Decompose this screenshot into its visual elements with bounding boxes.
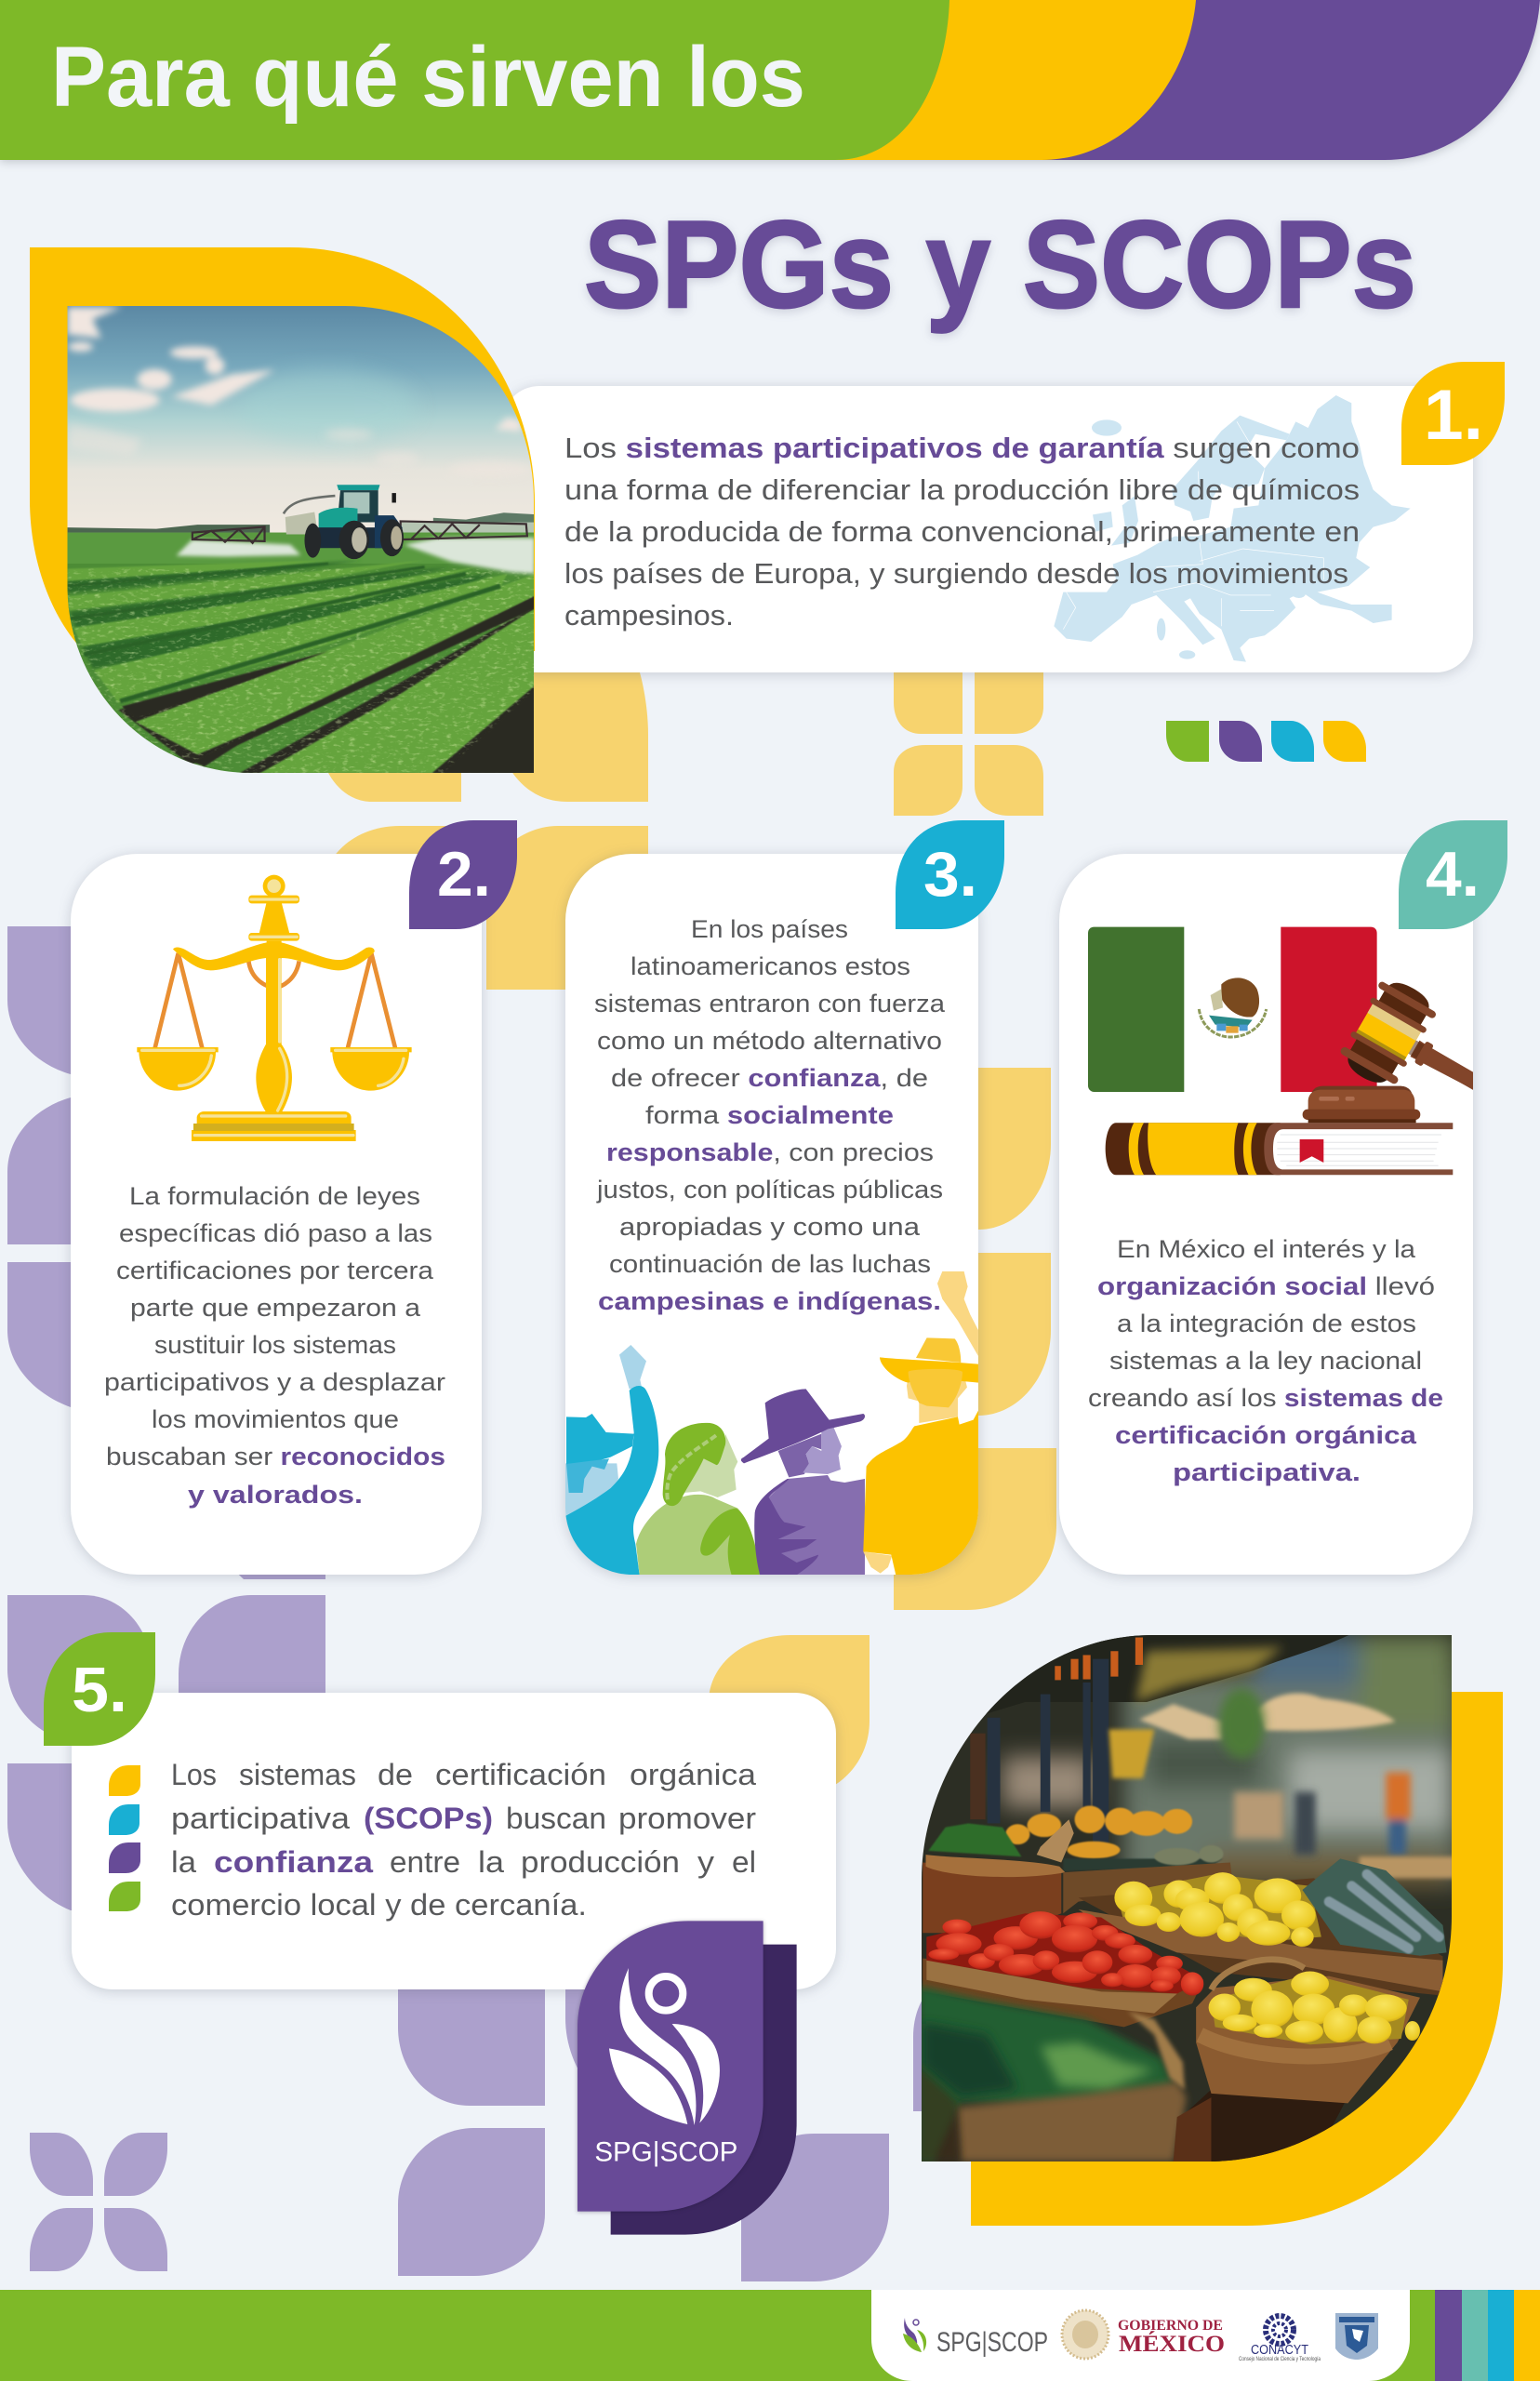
card 4 text: sistemas a la ley nacional xyxy=(1109,1347,1422,1375)
rear oranges xyxy=(1005,1806,1192,1858)
badge 2 xyxy=(409,820,517,929)
panel 3: people card xyxy=(565,820,1004,1575)
left basket xyxy=(923,1863,1061,1933)
photo: market stall xyxy=(919,1628,1458,2168)
card 3 text: justos, con políticas públicas xyxy=(596,1176,943,1204)
logo: Gobierno de México: GOBIERNO DE xyxy=(1118,2318,1223,2334)
row of four small leaves xyxy=(1166,721,1366,762)
card 3 text xyxy=(594,915,946,1315)
card 1 text xyxy=(564,432,1360,632)
book xyxy=(1106,1123,1281,1175)
logo: UNAM xyxy=(1335,2313,1378,2360)
card 3 text: apropiadas y como una xyxy=(619,1213,921,1241)
logo: CONACYT xyxy=(1239,2316,1321,2362)
card 2 text: y valorados. xyxy=(188,1481,363,1509)
posts xyxy=(988,1659,1109,1842)
card 1 text: una forma de diferenciar la producción libre de químicos xyxy=(564,473,1360,506)
card 4 text: organización social llevó xyxy=(1097,1272,1435,1300)
card 4 text: certificación orgánica xyxy=(1115,1421,1417,1449)
card 1 text: de la producida de forma convencional, primeramente en xyxy=(564,515,1360,548)
photo: tractor in field xyxy=(67,304,538,777)
badge 4 xyxy=(1399,820,1507,929)
logo: SPG SCOP: SPG|SCOP xyxy=(936,2327,1048,2358)
panel 1: card xyxy=(502,362,1505,672)
card 2 text xyxy=(104,1182,445,1509)
yellow person xyxy=(937,1271,978,1356)
middle basket with lemons xyxy=(1079,1878,1442,1996)
card 3 text: sistemas entraron con fuerza xyxy=(594,990,946,1018)
badge 5 xyxy=(44,1632,155,1746)
badge 4: 4. xyxy=(1426,839,1480,910)
badge 1: 1. xyxy=(1424,376,1483,455)
panel 2: scales card xyxy=(71,820,517,1575)
card 5 text: (SCOPs) xyxy=(364,1802,493,1835)
card 3 text: responsable , con precios xyxy=(606,1138,934,1166)
card 3 text: continuación de las luchas xyxy=(609,1250,931,1278)
card 4 text: En México el interés y la xyxy=(1117,1235,1416,1263)
sack xyxy=(957,2082,1187,2162)
card 4 background xyxy=(1059,854,1473,1575)
card 3 text: forma socialmente xyxy=(645,1101,894,1129)
card 5 background xyxy=(72,1693,836,1989)
front right basket xyxy=(1177,2090,1352,2162)
logo: Gobierno de México xyxy=(1062,2310,1225,2359)
panel 5: SCOP card xyxy=(44,1632,836,1989)
awning and foliage xyxy=(919,1628,1363,1729)
illustration: crowd of campesinos xyxy=(565,1271,978,1575)
card 2 background xyxy=(71,854,482,1575)
footer stripes xyxy=(1435,2290,1540,2381)
spray xyxy=(176,538,535,574)
yellow frame behind farm photo xyxy=(30,247,535,651)
card 2 text: parte que empezaron a xyxy=(130,1294,421,1322)
SPG SCOP logo badge: SPG|SCOP xyxy=(594,2136,737,2167)
yellow frame behind market photo xyxy=(971,1692,1503,2226)
card 3 text: como un método alternativo xyxy=(597,1027,942,1055)
people xyxy=(1234,1773,1411,1855)
card 4 text: creando así los sistemas de xyxy=(1088,1384,1443,1412)
card 1 text: campesinos. xyxy=(564,599,734,632)
sound block xyxy=(1311,1086,1412,1094)
gavel xyxy=(1334,973,1519,1137)
logo: Gobierno de México: MÉXICO xyxy=(1119,2331,1225,2357)
logo: CONACYT: CONACYT xyxy=(1251,2342,1308,2358)
card 4 text: participativa. xyxy=(1173,1458,1361,1486)
card 5 text: comercio local y de cercanía. xyxy=(171,1888,587,1922)
logo: CONACYT: Consejo Nacional de Ciencia y Tecnología xyxy=(1239,2357,1321,2362)
logo: SPG SCOP xyxy=(903,2318,1048,2358)
badge 2: 2. xyxy=(437,839,491,910)
booms xyxy=(192,521,527,543)
card 3 text: latinoamericanos estos xyxy=(631,952,910,980)
card 5 text: entre xyxy=(390,1845,460,1879)
card 2 text: buscaban ser reconocidos xyxy=(106,1443,445,1470)
bullets xyxy=(109,1765,140,1911)
card 5 text: participativa xyxy=(171,1802,350,1835)
field xyxy=(67,533,538,777)
card 2 text: los movimientos que xyxy=(152,1405,399,1433)
card 5 text: orgánica xyxy=(630,1758,756,1791)
greens lower left xyxy=(919,1986,1174,2162)
tank xyxy=(285,512,318,534)
SPG SCOP logo badge xyxy=(578,1921,797,2235)
greens top left xyxy=(928,1823,1021,1856)
card 3 text: de ofrecer confianza , de xyxy=(611,1064,928,1092)
card 3 background xyxy=(565,854,978,1575)
footer logo panel xyxy=(871,2290,1410,2381)
badge 5: 5. xyxy=(72,1655,127,1725)
treeline xyxy=(68,525,270,533)
footer green band xyxy=(0,2290,1540,2381)
decorative lavender leaves xyxy=(7,926,925,2281)
rows xyxy=(118,586,535,774)
card 5 text: buscan xyxy=(506,1802,606,1835)
card 2 text: sustituir los sistemas xyxy=(154,1331,396,1359)
emblem xyxy=(1199,978,1267,1037)
card 5 text: de xyxy=(378,1758,413,1791)
card 1 text: Los sistemas participativos de garantía surgen como xyxy=(564,432,1360,464)
card 2 text: específicas dió paso a las xyxy=(119,1219,432,1247)
umbrellas xyxy=(1256,1694,1395,1731)
card 4 text xyxy=(1088,1235,1443,1486)
blurred background xyxy=(919,1628,1454,2168)
card 5 text xyxy=(171,1758,756,1922)
badge 3 xyxy=(896,820,1004,929)
card 4 text: a la integración de estos xyxy=(1117,1310,1416,1337)
card 5 text: producción xyxy=(521,1845,680,1879)
header banner xyxy=(0,0,1540,160)
panel 4: Mexico card xyxy=(1059,820,1519,1575)
crop texture xyxy=(67,569,538,776)
card 5 text: certificación xyxy=(435,1758,606,1791)
tomato basket xyxy=(923,1959,1203,2027)
card 1 background xyxy=(502,386,1473,672)
card 5 text: la xyxy=(478,1845,504,1879)
rear basket xyxy=(1063,1863,1232,1913)
title line 1: Para qué sirven los xyxy=(51,30,805,125)
footer xyxy=(0,2290,1540,2381)
map of Europe xyxy=(1054,395,1411,662)
courgettes xyxy=(1302,1858,1447,1956)
green person xyxy=(684,1434,737,1497)
card 5 text: confianza xyxy=(214,1845,373,1879)
card 1 text: los países de Europa, y surgiendo desde los movimientos xyxy=(564,557,1348,590)
card 5 text: el xyxy=(732,1845,756,1879)
card 2 text: certificaciones por tercera xyxy=(116,1257,434,1284)
clouds xyxy=(68,307,521,432)
illustration: flag, gavel and book xyxy=(1088,927,1519,1175)
title line 2: SPGs y SCOPs xyxy=(584,196,1416,334)
decorative yellow leaves xyxy=(319,670,1056,1785)
card 5 text: y xyxy=(697,1845,714,1879)
tractor xyxy=(337,485,379,490)
card 3 text: campesinas e indígenas. xyxy=(598,1287,941,1315)
card 2 text: La formulación de leyes xyxy=(129,1182,420,1210)
card 5 text: Los xyxy=(171,1758,217,1791)
card 5 text: sistemas xyxy=(239,1758,356,1791)
badge 3: 3. xyxy=(923,839,977,910)
card 2 text: participativos y a desplazar xyxy=(104,1368,445,1396)
purple person xyxy=(760,1475,865,1575)
card 3 text: En los países xyxy=(691,915,848,943)
card 5 text: promover xyxy=(618,1802,756,1835)
badge 1 xyxy=(1401,362,1505,465)
blue person xyxy=(619,1345,646,1389)
card 5 text: la xyxy=(171,1845,196,1879)
icon: scales of justice xyxy=(137,875,412,1141)
